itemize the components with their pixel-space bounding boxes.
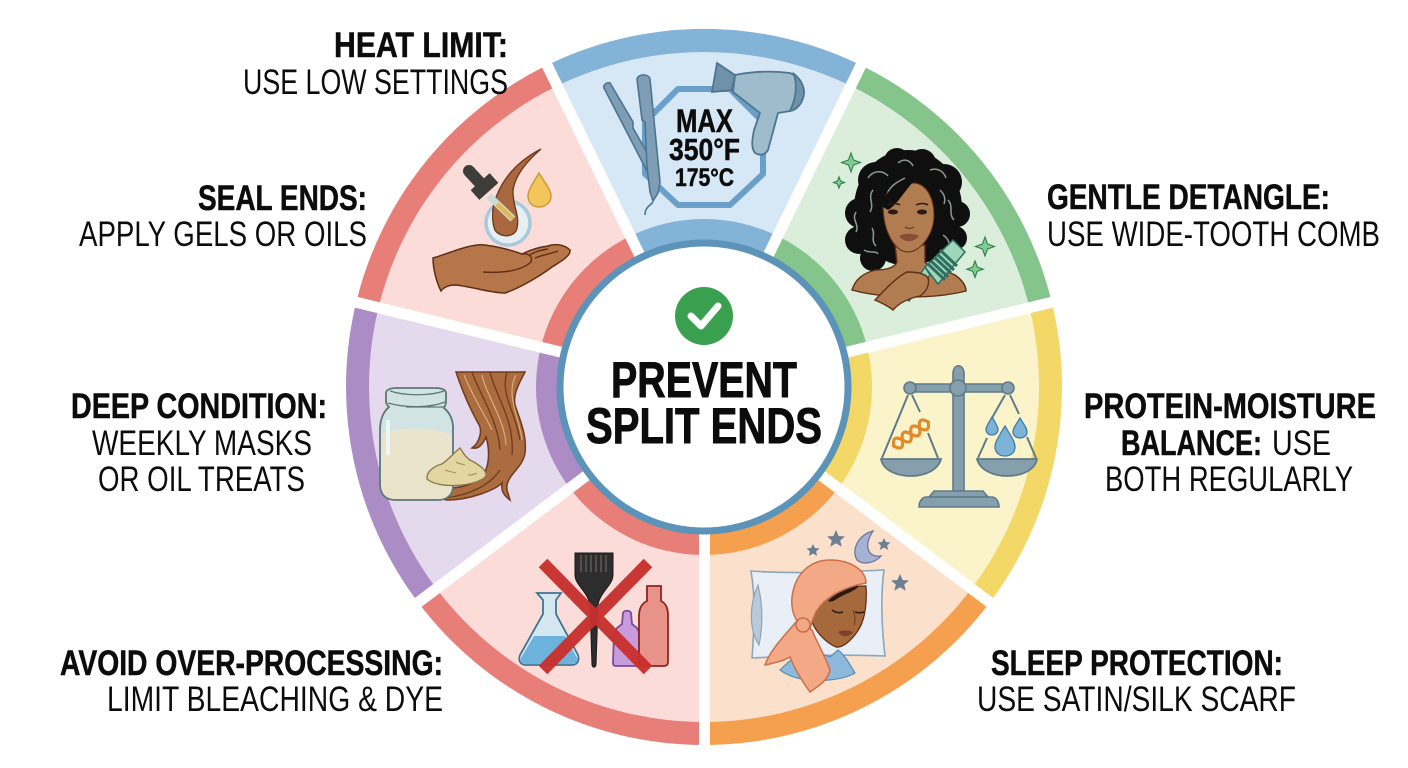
text: heat limit: USE LOW SETTINGS [243,63,508,102]
text: deep condition: DEEP CONDITION: [71,387,327,426]
shoulders [852,245,966,297]
shoulder [780,650,855,680]
text: deep condition [71,387,327,499]
panel: seal ends segment [356,65,704,387]
text: sleep protection: SLEEP PROTECTION: [991,644,1283,683]
sign text: 350°F [669,132,740,167]
red cross [543,563,648,670]
text: avoid over-processing [60,644,443,719]
hair strand [493,149,541,236]
pans [881,459,1037,476]
text: sleep protection [977,644,1296,719]
text: avoid over-processing: LIMIT BLEACHING & DYE [107,680,443,719]
small bottle [613,611,639,666]
flask [519,593,579,665]
hair lock [427,372,525,500]
sign text [669,103,740,192]
panel: sleep protection segment [704,387,990,745]
icon: oil dropper over hair strand and hand [433,149,570,293]
text: deep condition: WEEKLY MASKS [92,424,312,463]
sparkles [834,153,994,277]
icon: heat tools with max temperature sign [604,63,804,215]
text: sleep protection: USE SATIN/SILK SCARF [977,680,1296,719]
panel: avoid over-processing segment [418,387,704,745]
panel: deep condition segment [346,302,704,602]
sign text: MAX [676,103,734,139]
protein chain [891,417,931,451]
title [586,352,822,454]
pillow [751,570,885,658]
text: deep condition: OR OIL TREATS [98,460,305,499]
text: protein-moisture balance: BALANCE: [1121,424,1262,463]
octagon sign [645,89,763,205]
face [812,586,866,647]
jar [380,388,453,500]
title: SPLIT ENDS [586,398,822,454]
center circle [560,243,848,531]
water drops [986,417,1027,456]
icon: chemicals crossed out [519,553,668,670]
moon and stars [855,531,881,563]
text: gentle detangle: GENTLE DETANGLE: [1047,178,1330,217]
sign text: 175°C [675,164,734,192]
text: seal ends: SEAL ENDS: [198,179,367,218]
text: heat limit [243,26,508,102]
title: PREVENT [611,352,797,408]
arm and hand [875,272,929,310]
icon: hair dryer [712,63,804,155]
face [883,183,934,252]
text: gentle detangle [1047,178,1380,254]
icon: balance scale with protein and water [881,366,1037,507]
text: protein-moisture balance [1084,387,1376,499]
hand [433,245,570,293]
icon: flat iron [604,75,660,215]
panel: gentle detangle segment [704,65,1052,387]
tint brush [575,553,613,667]
icon: sleeping woman with satin scarf [751,530,909,692]
ring [486,201,530,245]
text: seal ends: APPLY GELS OR OILS [79,215,367,254]
icon: green check [675,287,733,345]
post and beam [904,366,1014,507]
cream mound [427,448,486,486]
oil drop [528,173,551,207]
text: heat limit: HEAT LIMIT: [334,26,508,65]
dropper [469,171,513,219]
text: seal ends [79,179,367,254]
panel: heat limit segment [547,29,861,387]
comb [905,240,965,301]
hair [845,148,970,271]
icon: jar of hair mask and hair lock [380,372,525,500]
big bottle [639,586,668,666]
text: protein-moisture balance: USE [1272,424,1331,463]
panel: protein-moisture segment [704,302,1062,602]
scarf [792,560,866,630]
wheel of seven segments [344,29,1064,757]
icon: woman combing curly hair [834,148,994,310]
text: avoid over-processing: AVOID OVER-PROCESSING: [60,644,443,683]
